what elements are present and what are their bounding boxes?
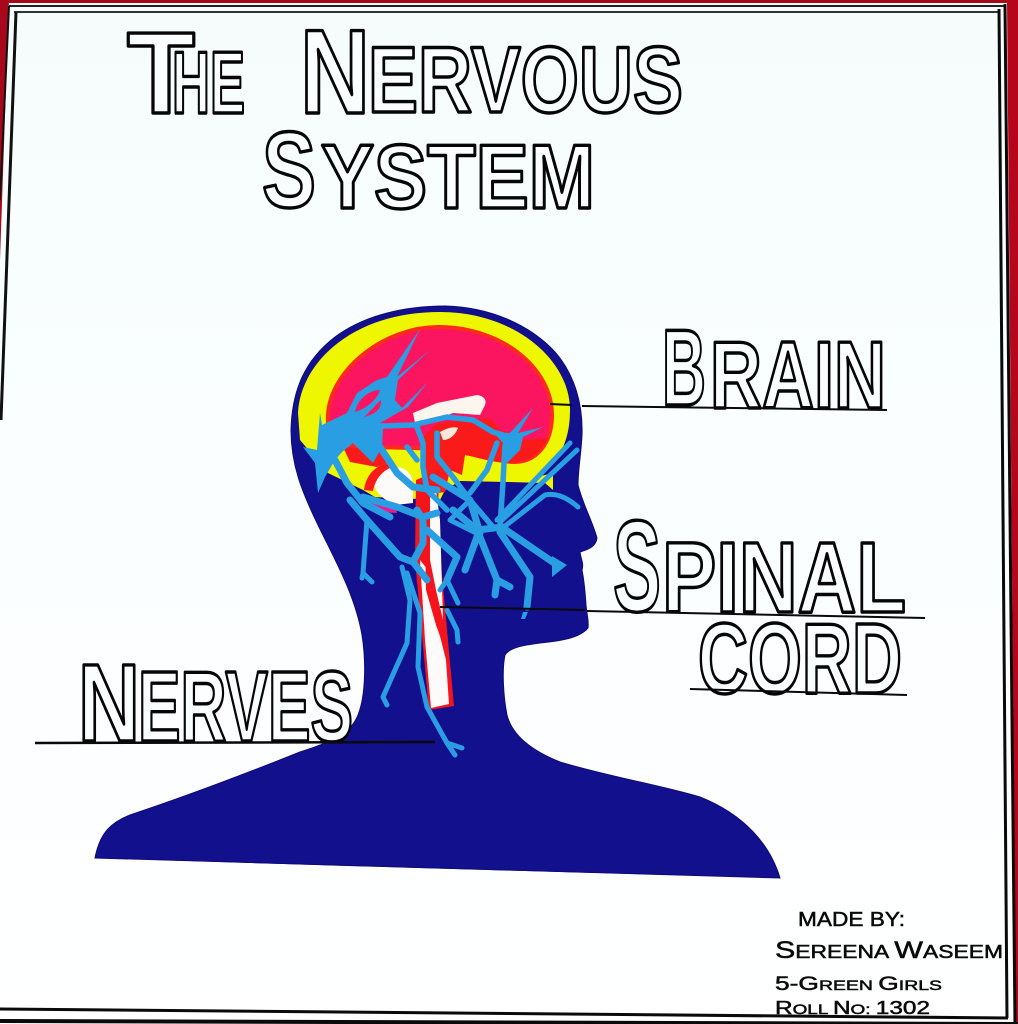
credits: MADE BY: — [798, 909, 905, 931]
nerve gaps in hub — [355, 390, 381, 417]
nerves label: ERVES — [138, 651, 353, 763]
spinal cord label — [440, 493, 925, 715]
head and shoulders silhouette — [95, 306, 780, 878]
credits: 5-G REEN G IRLS — [775, 974, 942, 995]
spinal cord — [415, 470, 454, 710]
spinal cord label: S — [613, 493, 661, 639]
title: T — [127, 8, 195, 138]
nerve hub: left blob — [303, 329, 430, 493]
nerve branches toward face — [450, 443, 578, 535]
spinal cord label: CORD — [698, 603, 902, 715]
title: YSTEM — [321, 127, 595, 228]
brain label — [550, 307, 887, 429]
nerves label: N — [78, 642, 140, 765]
small white brain structure — [440, 427, 458, 440]
cord white core — [420, 560, 449, 708]
nerves — [303, 329, 578, 755]
nerve tips — [521, 556, 567, 619]
brain label: RAIN — [710, 322, 886, 429]
credits — [775, 909, 1003, 1018]
red lower brain band — [343, 418, 548, 495]
brain — [298, 312, 570, 513]
title: N — [300, 5, 370, 139]
brain inner layer: pink cerebrum — [328, 327, 552, 462]
brain label: B — [662, 307, 706, 429]
nerve branches lower-left — [335, 447, 457, 580]
brain outer layer: yellow — [298, 312, 570, 500]
pink under-cerebellum sliver — [363, 500, 397, 513]
nerves label — [35, 642, 435, 765]
nerve hub: face — [433, 477, 557, 607]
nerve hub: right blob — [493, 408, 543, 463]
cerebellum red arc — [364, 463, 390, 491]
cord red casing — [415, 470, 454, 710]
title: ERVOUS — [368, 27, 683, 132]
spinal cord label: PINAL — [662, 522, 906, 634]
credits: R OLL N O: 1302 — [775, 998, 930, 1018]
nerve forks — [362, 520, 462, 755]
title: S — [262, 109, 316, 230]
cord red center thread — [424, 490, 445, 650]
cerebellum: white blob — [374, 467, 413, 505]
corpus callosum: white band — [413, 395, 486, 423]
credits: SEREENA W ASEEM — [775, 937, 1003, 964]
nerve branches upper — [383, 417, 510, 527]
title — [127, 5, 683, 230]
title: HE — [172, 33, 245, 132]
cord white upper strip — [430, 490, 443, 620]
